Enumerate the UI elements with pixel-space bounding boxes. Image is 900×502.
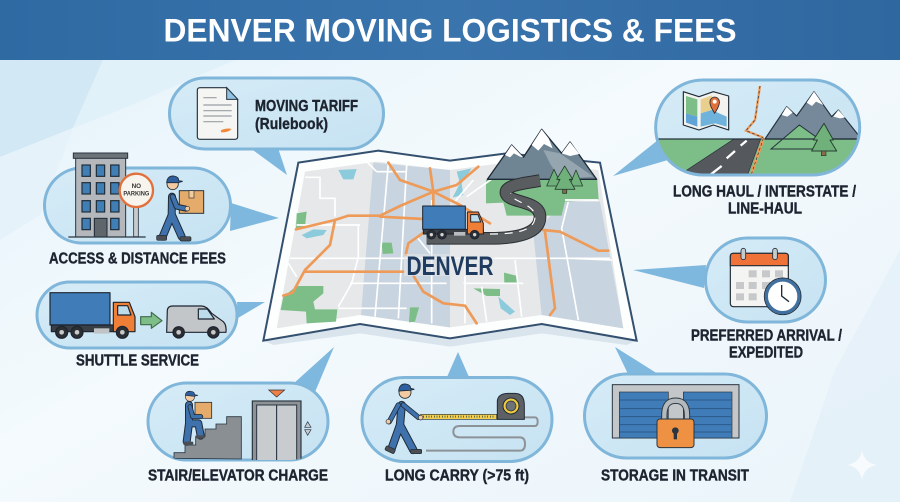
label: moving tariff xyxy=(255,98,358,133)
icon: building, no parking sign, mover xyxy=(68,153,204,241)
icon: calendar and clock xyxy=(730,248,801,315)
icon: truck, arrow, van xyxy=(50,293,226,338)
orange highways xyxy=(283,163,608,323)
icon: sparkle xyxy=(847,450,877,480)
panel: preferred arrival xyxy=(633,238,842,362)
label: long haul: LINE-HAUL xyxy=(728,200,802,218)
label: moving tariff: MOVING TARIFF xyxy=(255,98,358,115)
icon: building, no parking sign, mover: NO xyxy=(132,183,141,190)
label: access and distance fees: ACCESS & DISTANCE FEES xyxy=(49,250,226,268)
panel: long haul xyxy=(613,80,860,218)
panel: stair and elevator charge xyxy=(148,347,334,484)
icon: mover with measuring tape xyxy=(385,384,538,454)
icon: storage unit and padlock xyxy=(612,385,739,448)
panel: storage in transit xyxy=(584,347,766,484)
panel: moving tariff xyxy=(170,78,384,175)
mountains xyxy=(487,129,597,179)
label: stair and elevator charge: STAIR/ELEVATOR CHARGE xyxy=(148,468,328,484)
panel: shuttle service xyxy=(37,282,265,370)
icon: building, no parking sign, mover: PARKING xyxy=(123,190,149,197)
icon: stairs, mover, elevator xyxy=(174,390,311,461)
label: moving tariff: (Rulebook) xyxy=(255,116,328,133)
winding road xyxy=(427,181,540,238)
label: preferred arrival: PREFERRED ARRIVAL / xyxy=(691,328,842,344)
moving truck xyxy=(423,206,483,239)
street grid xyxy=(288,162,612,323)
label: long haul: LONG HAUL / INTERSTATE / xyxy=(673,184,856,200)
panel: access and distance fees xyxy=(44,153,279,268)
label: preferred arrival: EXPEDITED xyxy=(729,344,803,362)
pine trees xyxy=(547,166,583,193)
central folded map xyxy=(263,129,637,347)
title: DENVER MOVING LOGISTICS & FEES xyxy=(164,12,736,48)
parks and water xyxy=(281,168,599,323)
label: storage in transit: STORAGE IN TRANSIT xyxy=(601,468,749,484)
label: long haul xyxy=(673,184,856,218)
map label: Denver: DENVER xyxy=(406,251,494,281)
city label backing xyxy=(404,254,495,276)
header banner xyxy=(0,0,900,60)
label: shuttle service: SHUTTLE SERVICE xyxy=(76,352,199,370)
label: long carry: LONG CARRY (>75 ft) xyxy=(385,468,529,484)
icon: highway scene with map xyxy=(656,80,860,176)
label: preferred arrival xyxy=(691,328,842,362)
icon: document xyxy=(197,88,238,139)
panel: long carry xyxy=(362,352,552,484)
